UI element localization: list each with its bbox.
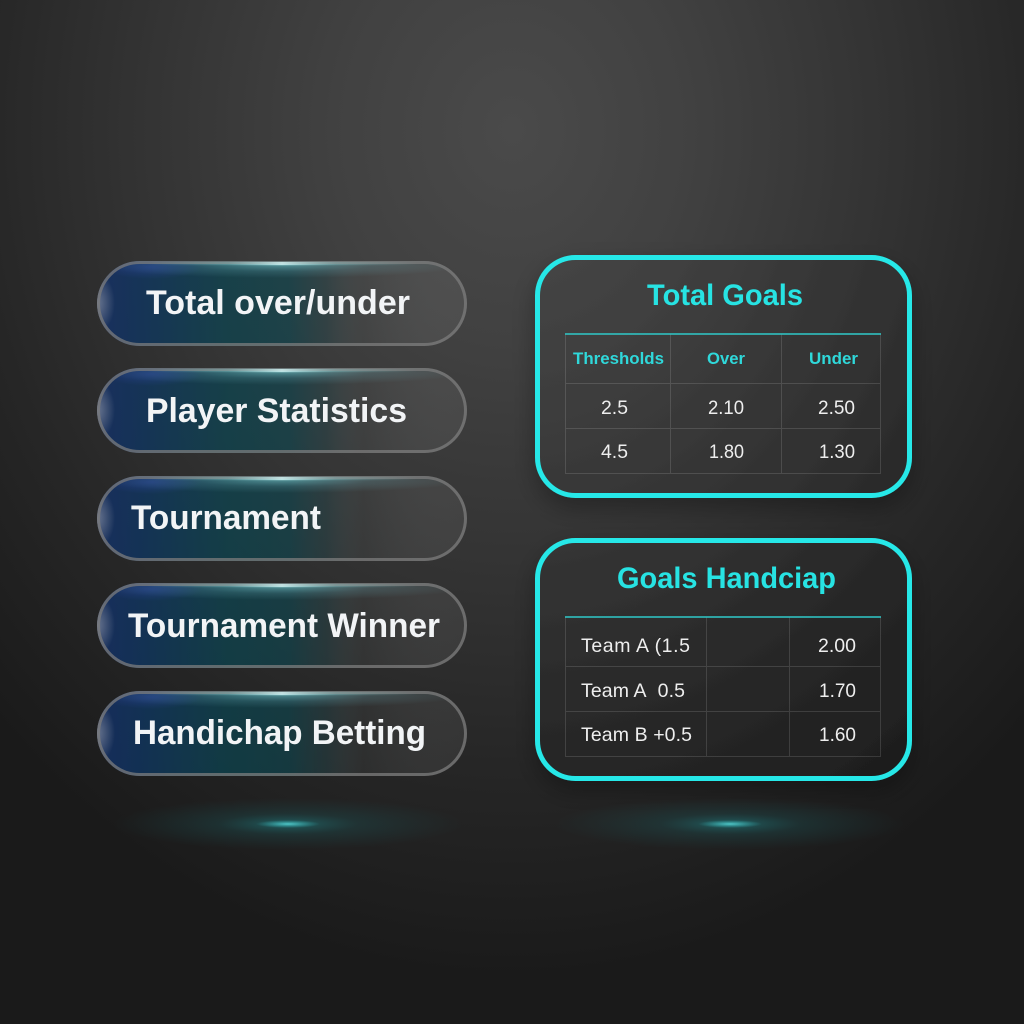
table: total goals odds: 1.80 xyxy=(709,441,744,463)
pill: Total over/under xyxy=(79,252,467,346)
table: total goals odds: 2.5 xyxy=(601,397,628,419)
table: goals handicap odds: 1.60 xyxy=(819,724,856,746)
table: total goals odds: 2.50 xyxy=(818,397,855,419)
panel: Goals Handicap xyxy=(538,540,910,778)
pill: Player Statistics xyxy=(79,359,467,453)
pill: Tournament: Tournament xyxy=(131,499,321,537)
table: total goals odds: 1.30 xyxy=(819,441,855,463)
pill: Tournament xyxy=(79,467,467,561)
pill: Tournament Winner xyxy=(79,574,467,668)
panel: Total Goals xyxy=(538,258,910,496)
table: goals handicap odds: Team A 0.5 xyxy=(581,680,685,702)
table: goals handicap odds: Team B +0.5 xyxy=(581,724,692,746)
table: total goals odds: Over xyxy=(707,349,745,368)
pill: Tournament Winner: Tournament Winner xyxy=(128,607,440,645)
table: goals handicap odds xyxy=(565,617,881,756)
table: goals handicap odds: Team A (1.5 xyxy=(581,635,690,657)
floor glow: left xyxy=(113,798,463,850)
pill: Handichap Betting: Handichap Betting xyxy=(133,714,426,752)
floor glow: right xyxy=(555,798,905,850)
table: goals handicap odds: 1.70 xyxy=(819,680,856,702)
pill: Total over/under: Total over/under xyxy=(146,284,410,322)
table: total goals odds: Thresholds xyxy=(573,349,664,368)
heading: Goals Handciap: Goals Handciap xyxy=(617,562,836,595)
table: total goals odds xyxy=(565,334,881,474)
table: total goals odds: 4.5 xyxy=(601,441,628,463)
pill: Handichap Betting xyxy=(79,682,467,776)
table: goals handicap odds: 2.00 xyxy=(818,635,856,657)
pill: Player Statistics: Player Statistics xyxy=(146,392,407,430)
heading: Total Goals: Total Goals xyxy=(647,279,803,312)
table: total goals odds: Under xyxy=(809,349,858,368)
table: total goals odds: 2.10 xyxy=(708,397,744,419)
